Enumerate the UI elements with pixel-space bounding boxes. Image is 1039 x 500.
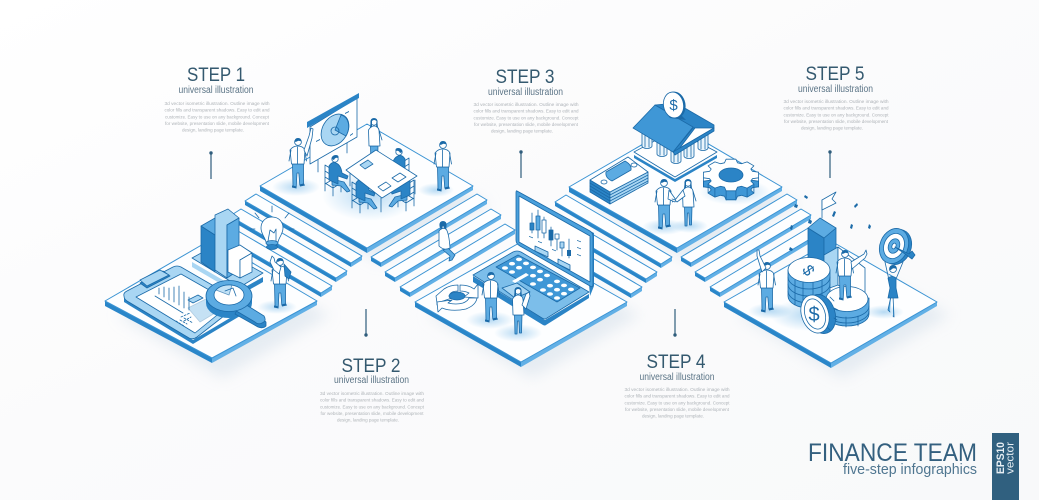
pin: step 4 (673, 309, 677, 337)
heading: step 1: STEP 1 (187, 64, 245, 86)
description: step 2 (320, 391, 425, 424)
pin: step 2 (364, 309, 368, 337)
figure sitting on stairs (439, 221, 455, 261)
subtitle: step 4: universal illustration (640, 372, 714, 383)
badge: EPS10 vector (992, 433, 1019, 500)
step 5 text block (784, 63, 889, 132)
title: finance team: FINANCE TEAM (808, 439, 977, 467)
description: step 3 (474, 102, 579, 135)
description: step 1 (164, 101, 270, 134)
step 1 text block (164, 64, 270, 134)
panel: step 3 laptop platform (415, 191, 627, 367)
stair bars: step 4 to 5 (681, 194, 825, 297)
man looking at bulb (270, 256, 291, 308)
description: step 5: for website, presentation slide, mobile development (784, 119, 889, 125)
icon: circular arrows (436, 284, 478, 312)
description: step 4 (624, 387, 730, 420)
icon: clipboard with report (124, 266, 240, 344)
man cheering left (757, 250, 776, 312)
icon: coin stacks: $ (808, 304, 820, 326)
description: step 1: for website, presentation slide, mobile development (165, 121, 270, 127)
badge: EPS10 vector: vector (1004, 442, 1016, 474)
two people at laptop (482, 272, 530, 334)
description: step 4: for website, presentation slide, mobile development (625, 407, 730, 413)
pin: step 1 (209, 151, 213, 179)
icon: laptop with candlestick chart (473, 191, 594, 326)
icon: magnifying glass (206, 280, 266, 328)
icon: coin stacks (788, 258, 869, 337)
panel: step 2 analysis platform (105, 206, 317, 363)
icon: bar towers on base (192, 209, 263, 295)
stair bars: step 3 to 4 (525, 195, 672, 298)
description: step 4: color fills and transparent shadows. Easy to edit and (624, 394, 730, 400)
description: step 5: design, landing page template. (801, 126, 863, 132)
icon: presentation board with pie chart (307, 93, 359, 172)
standing man, right (434, 141, 452, 192)
woman holding target (874, 224, 917, 317)
description: step 3: color fills and transparent shadows. Easy to edit and (474, 109, 579, 115)
description: step 1: 3d vector isometric illustration. Outline image with (164, 101, 270, 107)
description: step 1: color fills and transparent shadows. Easy to edit and (164, 108, 270, 114)
heading: step 4: STEP 4 (646, 351, 706, 373)
stair bars: step 2 to 3 (371, 194, 515, 297)
pin: step 5 (828, 150, 832, 178)
description: step 3: 3d vector isometric illustration. Outline image with (474, 102, 579, 108)
subtitle: step 5: universal illustration (798, 84, 873, 95)
icon: coin stacks: $ (798, 262, 817, 279)
description: step 3: for website, presentation slide, mobile development (474, 122, 579, 128)
step 4 text block (624, 351, 730, 420)
description: step 4: customize. Easy to use on any background. Concept (624, 400, 730, 406)
description: step 4: design, landing page template. (642, 414, 704, 420)
description: step 1: customize. Easy to use on any background. Concept (165, 114, 270, 120)
heading: step 2: STEP 2 (342, 355, 400, 377)
heading: step 5: STEP 5 (806, 63, 865, 85)
description: step 2: color fills and transparent shadows. Easy to edit and (320, 398, 424, 404)
subtitle: step 1: universal illustration (178, 85, 254, 96)
icon: bank building with coin: $ (669, 97, 678, 114)
subtitle: step 3: universal illustration (488, 87, 563, 98)
description: step 1: design, landing page template. (182, 128, 244, 134)
panel: step 1 meeting platform (260, 93, 473, 253)
subtitle: step 2: universal illustration (334, 375, 409, 386)
badge: EPS10 vector: EPS10 (995, 442, 1007, 474)
step 3 text block (474, 66, 579, 135)
heading: step 3: STEP 3 (496, 66, 554, 88)
description: step 5: customize. Easy to use on any background. Concept (784, 112, 889, 118)
icon: stack of money (590, 157, 648, 204)
subtitle: five-step infographics: five-step infographics (843, 462, 977, 478)
icon: gear (703, 159, 759, 200)
step 2 text block (320, 355, 425, 424)
meeting table with seated people (325, 118, 417, 213)
pin: step 3 (519, 150, 523, 178)
icon: bank building with coin (633, 90, 717, 182)
description: step 2: 3d vector isometric illustration. Outline image with (320, 391, 424, 397)
description: step 5 (784, 99, 889, 132)
description: step 2: customize. Easy to use on any background. Concept (320, 404, 425, 410)
presenter (289, 128, 313, 188)
panel: step 4 bank platform (569, 90, 782, 253)
description: step 5: color fills and transparent shadows. Easy to edit and (784, 106, 889, 112)
panel: step 5 success platform (724, 192, 937, 368)
description: step 2: design, landing page template. (337, 418, 399, 424)
description: step 4: 3d vector isometric illustration. Outline image with (624, 387, 730, 393)
description: step 5: 3d vector isometric illustration. Outline image with (784, 99, 889, 105)
icon: light bulb (250, 206, 294, 250)
handshake people (655, 179, 696, 230)
icon: flag and towers (789, 192, 871, 300)
man on coins (836, 250, 867, 300)
description: step 2: for website, presentation slide, mobile development (320, 411, 424, 417)
stair bars: step 1 to 2 (215, 194, 362, 297)
description: step 3: design, landing page template. (491, 129, 553, 135)
soft platform shadows (118, 150, 950, 378)
description: step 3: customize. Easy to use on any background. Concept (474, 115, 579, 121)
